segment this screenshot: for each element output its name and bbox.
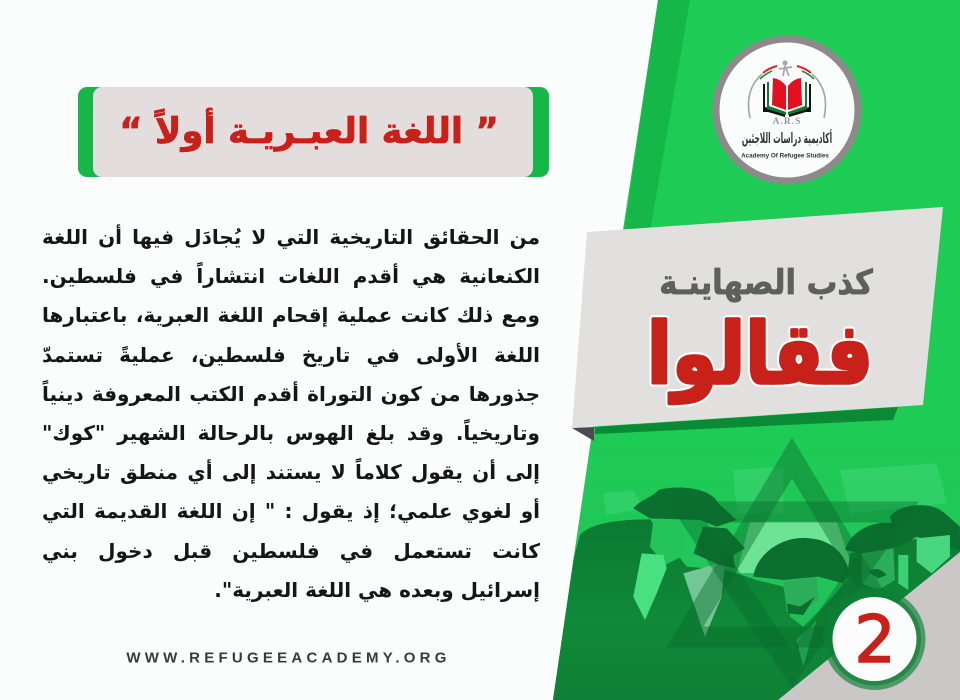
star of David: [685, 458, 899, 669]
body paragraph: الكنعانية هي أقدم اللغات انتشاراً في فلسطين.: [42, 264, 540, 288]
body paragraph: كانت تستعمل في فلسطين قبل دخول بني: [42, 538, 540, 562]
logo arabic name: أكاديمية دراسات اللاجئين: [742, 129, 832, 147]
banner main word: فقالوا: [647, 305, 873, 403]
body paragraph: إلى أن يقول كلاماً لا يستند إلى أي منطق تاريخي: [42, 460, 540, 484]
green right panel: [553, 0, 960, 700]
grey title banner: [572, 207, 943, 428]
body paragraph: وتاريخياً. وقد بلغ الهوس بالرحالة الشهير "كوك": [42, 421, 540, 445]
body paragraph: إسرائيل وبعده هي اللغة العبرية".: [214, 578, 540, 602]
body paragraph: جذورها من كون التوراة أقدم الكتب المعروفة دينياً: [42, 382, 540, 406]
crowd illustration: [543, 440, 960, 700]
body paragraph: ومع ذلك كانت عملية إقحام اللغة العبرية، باعتبارها: [42, 303, 540, 327]
banner main word: فقالوا: [647, 305, 873, 403]
body paragraph: [42, 224, 540, 602]
logo book icon: [748, 60, 826, 118]
heading bar: [78, 87, 549, 177]
body paragraph: من الحقائق التاريخية التي لا يُجادَل فيها أن اللغة: [42, 225, 540, 249]
logo english name: Academy Of Refugee Studies: [741, 152, 829, 160]
banner subtitle: كذب الصهاينـة: [659, 262, 873, 302]
grey corner triangle: [778, 552, 960, 700]
dark ribbon shadow: [572, 407, 898, 441]
body paragraph: اللغة الأولى في تاريخ فلسطين، عمليةً تستمدّ: [42, 343, 540, 367]
number badge: [828, 592, 921, 686]
number badge: 2: [854, 603, 896, 678]
website address: WWW.REFUGEEACADEMY.ORG: [126, 650, 451, 666]
logo badge: [716, 39, 858, 181]
heading bar: ” اللغة العبـريـة أولاً “: [119, 107, 499, 152]
body paragraph: أو لغوي علمي؛ إذ يقول : " إن اللغة القديمة التي: [42, 499, 540, 523]
logo initials: A.R.S: [773, 117, 801, 127]
